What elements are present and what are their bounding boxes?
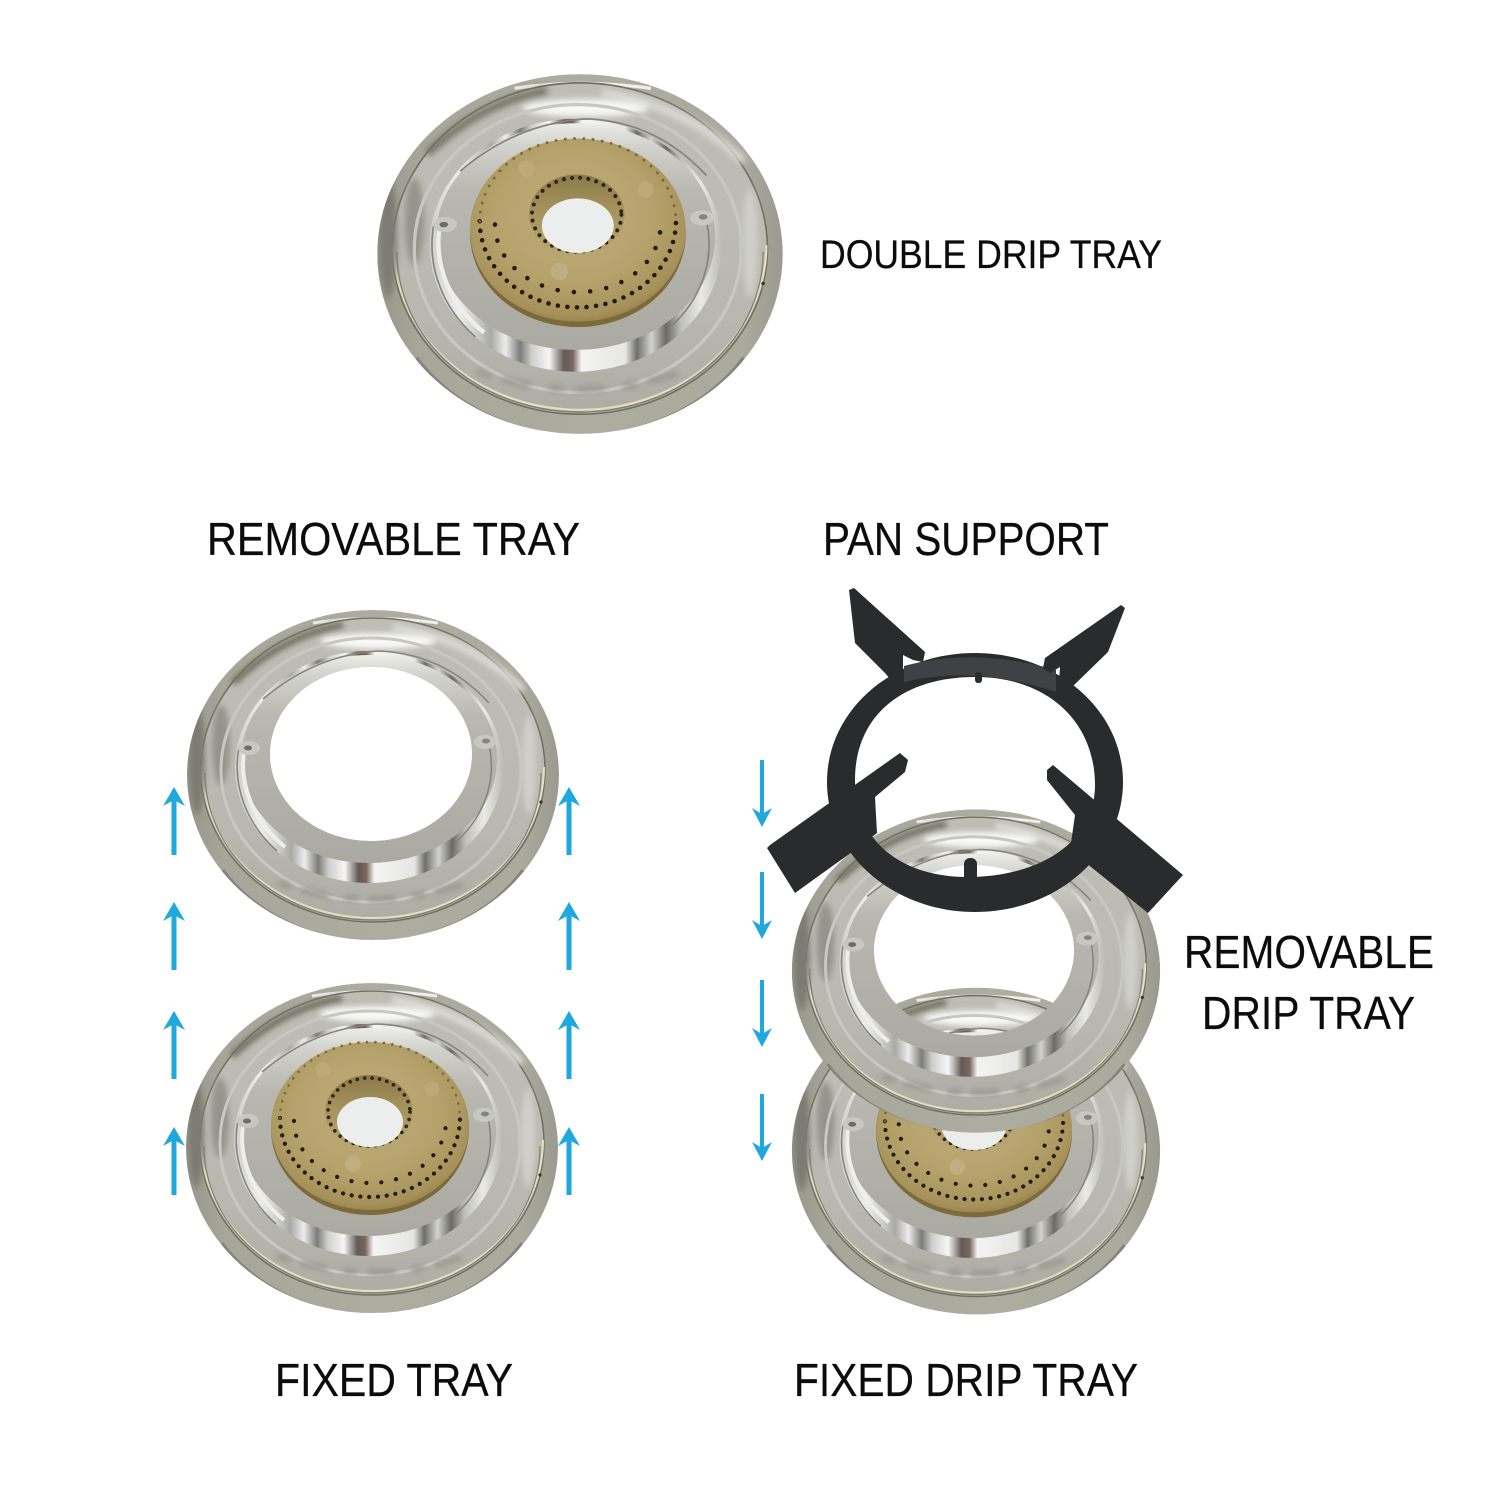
tray: removable tray, left column xyxy=(187,610,559,942)
heading: removable tray: REMOVABLE TRAY xyxy=(207,513,580,565)
heading: pan support: PAN SUPPORT xyxy=(823,513,1109,565)
tray: fixed tray, left column xyxy=(186,983,558,1315)
tray: double drip tray with burner xyxy=(377,74,783,436)
label: removable drip tray xyxy=(1184,926,1434,1039)
arrows: upward, right side xyxy=(558,787,580,1195)
tray: fixed drip tray, right column xyxy=(792,988,1160,1316)
arrows: downward, right column xyxy=(752,760,772,1161)
label: double drip tray: DOUBLE DRIP TRAY xyxy=(820,233,1162,277)
label: removable drip tray: REMOVABLE xyxy=(1184,926,1434,978)
arrows: upward, left side xyxy=(163,787,185,1195)
tray: removable drip tray, right column xyxy=(792,809,1160,1134)
label: fixed drip tray: FIXED DRIP TRAY xyxy=(794,1354,1138,1406)
label: removable drip tray: DRIP TRAY xyxy=(1202,987,1415,1039)
pan support xyxy=(767,588,1183,913)
label: fixed tray: FIXED TRAY xyxy=(275,1354,513,1406)
